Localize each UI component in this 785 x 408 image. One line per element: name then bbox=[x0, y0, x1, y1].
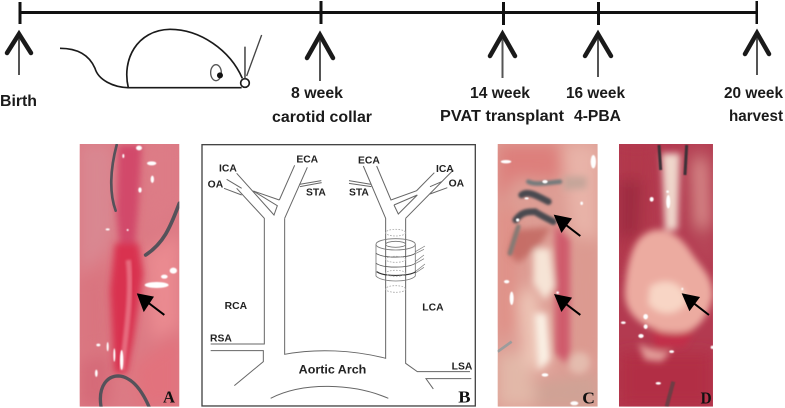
panel letter C: C bbox=[582, 388, 595, 407]
label: 20 week harvest: 20 week bbox=[724, 85, 783, 102]
label: 20 week harvest bbox=[724, 85, 784, 125]
collar bbox=[376, 229, 425, 292]
vessel labels: RSA bbox=[210, 334, 232, 345]
arrows bbox=[555, 216, 580, 236]
arrow: birth bbox=[7, 34, 31, 75]
vessel labels: RCA bbox=[225, 301, 248, 312]
vessel labels: STA bbox=[306, 187, 326, 198]
timeline axis bbox=[18, 1, 758, 25]
vessel labels: Aortic Arch bbox=[299, 363, 366, 377]
arrow bbox=[683, 295, 709, 315]
vessel labels bbox=[208, 155, 473, 377]
label: 14 week PVAT transplant bbox=[440, 85, 565, 125]
panel letter A: A bbox=[163, 388, 175, 407]
suture knot bbox=[510, 182, 560, 253]
suture bbox=[100, 145, 179, 407]
label: 8 week carotid collar bbox=[272, 85, 372, 126]
label: 16 week 4-PBA bbox=[566, 85, 625, 125]
wire bbox=[498, 342, 512, 352]
icon: mouse bbox=[60, 29, 262, 88]
label: 8 week carotid collar: 8 week bbox=[291, 85, 343, 102]
vessel labels: ICA bbox=[219, 163, 237, 174]
highlights bbox=[621, 190, 715, 385]
panel: photo A bbox=[80, 144, 179, 407]
label: 20 week harvest: harvest bbox=[729, 108, 784, 125]
panel: carotid diagram B bbox=[202, 145, 475, 406]
arrow: 20 week bbox=[745, 33, 769, 75]
vessel labels: ECA bbox=[358, 156, 380, 167]
label: 14 week PVAT transplant: PVAT transplant bbox=[440, 108, 565, 125]
vessel labels: ICA bbox=[436, 164, 454, 175]
panel: photo C bbox=[498, 144, 598, 407]
vessel labels: OA bbox=[208, 180, 224, 191]
vessel labels: ECA bbox=[296, 155, 319, 166]
label: 8 week carotid collar: carotid collar bbox=[272, 109, 372, 126]
arrow: 16 week bbox=[585, 34, 611, 77]
highlights bbox=[95, 146, 177, 377]
panel: photo D bbox=[619, 144, 715, 407]
label: 16 week 4-PBA: 16 week bbox=[566, 85, 625, 102]
arrow bbox=[138, 295, 164, 315]
vessel labels: LSA bbox=[452, 362, 473, 373]
vessel labels: OA bbox=[449, 179, 465, 190]
label: birth: Birth bbox=[0, 93, 37, 110]
highlights bbox=[501, 155, 596, 405]
vessel labels: LCA bbox=[422, 302, 444, 313]
vessel labels: STA bbox=[349, 187, 369, 198]
vessel outlines bbox=[211, 165, 471, 398]
arrow: 8 week bbox=[307, 35, 333, 81]
panel letter D: D bbox=[701, 388, 712, 407]
label: 16 week 4-PBA: 4-PBA bbox=[574, 108, 621, 125]
arrow: 14 week bbox=[490, 34, 515, 78]
panel letter B: B bbox=[458, 387, 471, 406]
label: 14 week PVAT transplant: 14 week bbox=[470, 85, 530, 102]
suture marks bbox=[659, 145, 687, 407]
